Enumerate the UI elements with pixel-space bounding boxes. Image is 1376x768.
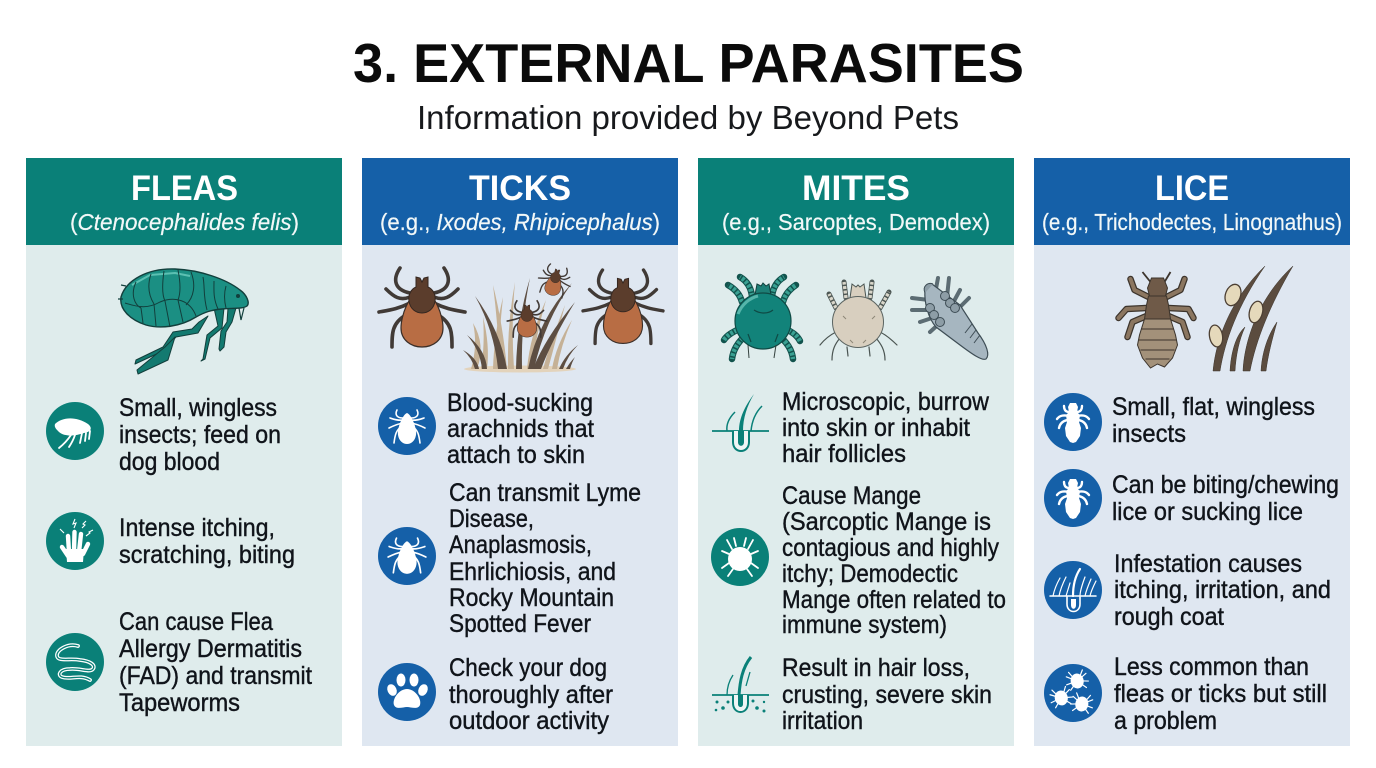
panel: fleas — [26, 158, 342, 746]
text: Spotted Fever — [449, 610, 591, 638]
text: hair follicles — [782, 440, 906, 468]
text: rough coat — [1114, 603, 1224, 631]
header: fleas: (Ctenocephalides felis) — [70, 209, 299, 235]
icon: tapeworm — [46, 633, 104, 691]
bullet: microscopic — [712, 388, 990, 468]
header: fleas: FLEAS — [131, 169, 238, 208]
text — [782, 482, 1006, 639]
text: Microscopic, burrow — [782, 388, 990, 416]
text — [782, 388, 990, 468]
text: Allergy Dermatitis — [119, 635, 302, 663]
text — [119, 394, 281, 476]
text: a problem — [1114, 707, 1217, 735]
illustration: flea — [118, 269, 248, 374]
text: Disease, — [449, 505, 534, 533]
bullet: flea allergy dermatitis — [46, 608, 312, 717]
text — [449, 479, 641, 638]
panel: mites — [698, 158, 1014, 746]
text: Result in hair loss, — [782, 654, 970, 682]
panel: ticks — [362, 158, 678, 746]
icon: louse — [1044, 393, 1102, 451]
illustration: demodex mite — [912, 278, 988, 359]
text — [1114, 550, 1331, 631]
text: Mange often related to — [782, 586, 1006, 614]
bullet: cause mange — [711, 482, 1006, 639]
text: insects — [1112, 420, 1186, 448]
icon: three lice — [1044, 664, 1102, 722]
text — [782, 654, 992, 735]
text: Cause Mange — [782, 482, 921, 510]
text: Check your dog — [449, 654, 607, 682]
text: dog blood — [119, 448, 220, 476]
text: lice or sucking lice — [1112, 498, 1303, 526]
text: Ehrlichiosis, and — [449, 558, 616, 586]
text: (FAD) and transmit — [119, 662, 312, 690]
icon: mite — [711, 528, 769, 586]
text: scratching, biting — [119, 541, 295, 569]
header: ticks: TICKS — [469, 169, 571, 208]
text: Can be biting/chewing — [1112, 471, 1339, 499]
text — [449, 654, 613, 735]
icon: damaged hair follicle — [712, 657, 769, 712]
text: itchy; Demodectic — [782, 560, 958, 588]
text — [119, 608, 312, 717]
text: Intense itching, — [119, 514, 275, 542]
title: 3. EXTERNAL PARASITES — [353, 32, 1024, 94]
illustration: tan mite — [820, 282, 897, 360]
text — [447, 389, 594, 469]
subtitle: Information provided by Beyond Pets — [417, 99, 959, 136]
bullet: intense itching — [46, 512, 295, 570]
bullet: hair loss — [712, 654, 992, 735]
text: contagious and highly — [782, 534, 999, 562]
bullet: infestation — [1044, 550, 1331, 631]
illustration: teal mite — [724, 277, 800, 359]
text: Tapeworms — [119, 689, 240, 717]
text: insects; feed on — [119, 421, 281, 449]
header: lice — [1034, 158, 1350, 245]
icon: paw — [378, 663, 436, 721]
text — [119, 514, 295, 569]
icon: tick outline — [378, 527, 436, 585]
text: Less common than — [1114, 653, 1309, 681]
text: (Sarcoptic Mange is — [782, 508, 991, 536]
header: mites: MITES — [802, 169, 910, 208]
bullet: less common — [1044, 653, 1327, 735]
text: Small, flat, wingless — [1112, 393, 1315, 421]
text — [1112, 471, 1339, 526]
illustration: ticks and grass — [379, 262, 663, 372]
header: ticks: (e.g., Ixodes, Rhipicephalus) — [380, 209, 660, 235]
text: crusting, severe skin — [782, 681, 992, 709]
bullet: biting or sucking — [1044, 469, 1339, 527]
text: attach to skin — [447, 441, 585, 469]
bullet: transmit diseases — [378, 479, 641, 638]
text: Can cause Flea — [119, 608, 273, 636]
text: thoroughly after — [449, 681, 613, 709]
icon: scratching hand — [46, 512, 104, 570]
text: itching, irritation, and — [1114, 576, 1331, 604]
bullet: small wingless insects — [46, 394, 281, 476]
text: immune system) — [782, 611, 947, 639]
text: Rocky Mountain — [449, 584, 614, 612]
panel: lice — [1034, 158, 1350, 746]
icon: louse — [1044, 469, 1102, 527]
text: Infestation causes — [1114, 550, 1302, 578]
text: fleas or ticks but still — [1114, 680, 1327, 708]
text: outdoor activity — [449, 707, 609, 735]
text: irritation — [782, 707, 863, 735]
header: fleas — [26, 158, 342, 245]
header: mites: (e.g., Sarcoptes, Demodex) — [722, 209, 990, 235]
text — [1112, 393, 1315, 448]
illustration: hair with nits — [1208, 266, 1293, 371]
icon: hair follicle — [712, 394, 769, 451]
illustration: louse — [1118, 272, 1194, 368]
text: Blood-sucking — [447, 389, 593, 417]
header: ticks — [362, 158, 678, 245]
icon: flea — [46, 402, 104, 460]
text — [1114, 653, 1327, 735]
icon: tick — [378, 397, 436, 455]
text: Small, wingless — [119, 394, 277, 422]
icon: coat follicle — [1044, 561, 1102, 619]
text: arachnids that — [447, 415, 594, 443]
text: into skin or inhabit — [782, 414, 970, 442]
bullet: small flat wingless — [1044, 393, 1315, 451]
header: lice: LICE — [1155, 169, 1229, 208]
text: Can transmit Lyme — [449, 479, 641, 507]
header: mites — [698, 158, 1014, 245]
bullet: check your dog — [378, 654, 613, 735]
text: Anaplasmosis, — [449, 531, 592, 559]
bullet: blood-sucking arachnids — [378, 389, 594, 469]
header: lice: (e.g., Trichodectes, Linognathus) — [1042, 209, 1342, 235]
